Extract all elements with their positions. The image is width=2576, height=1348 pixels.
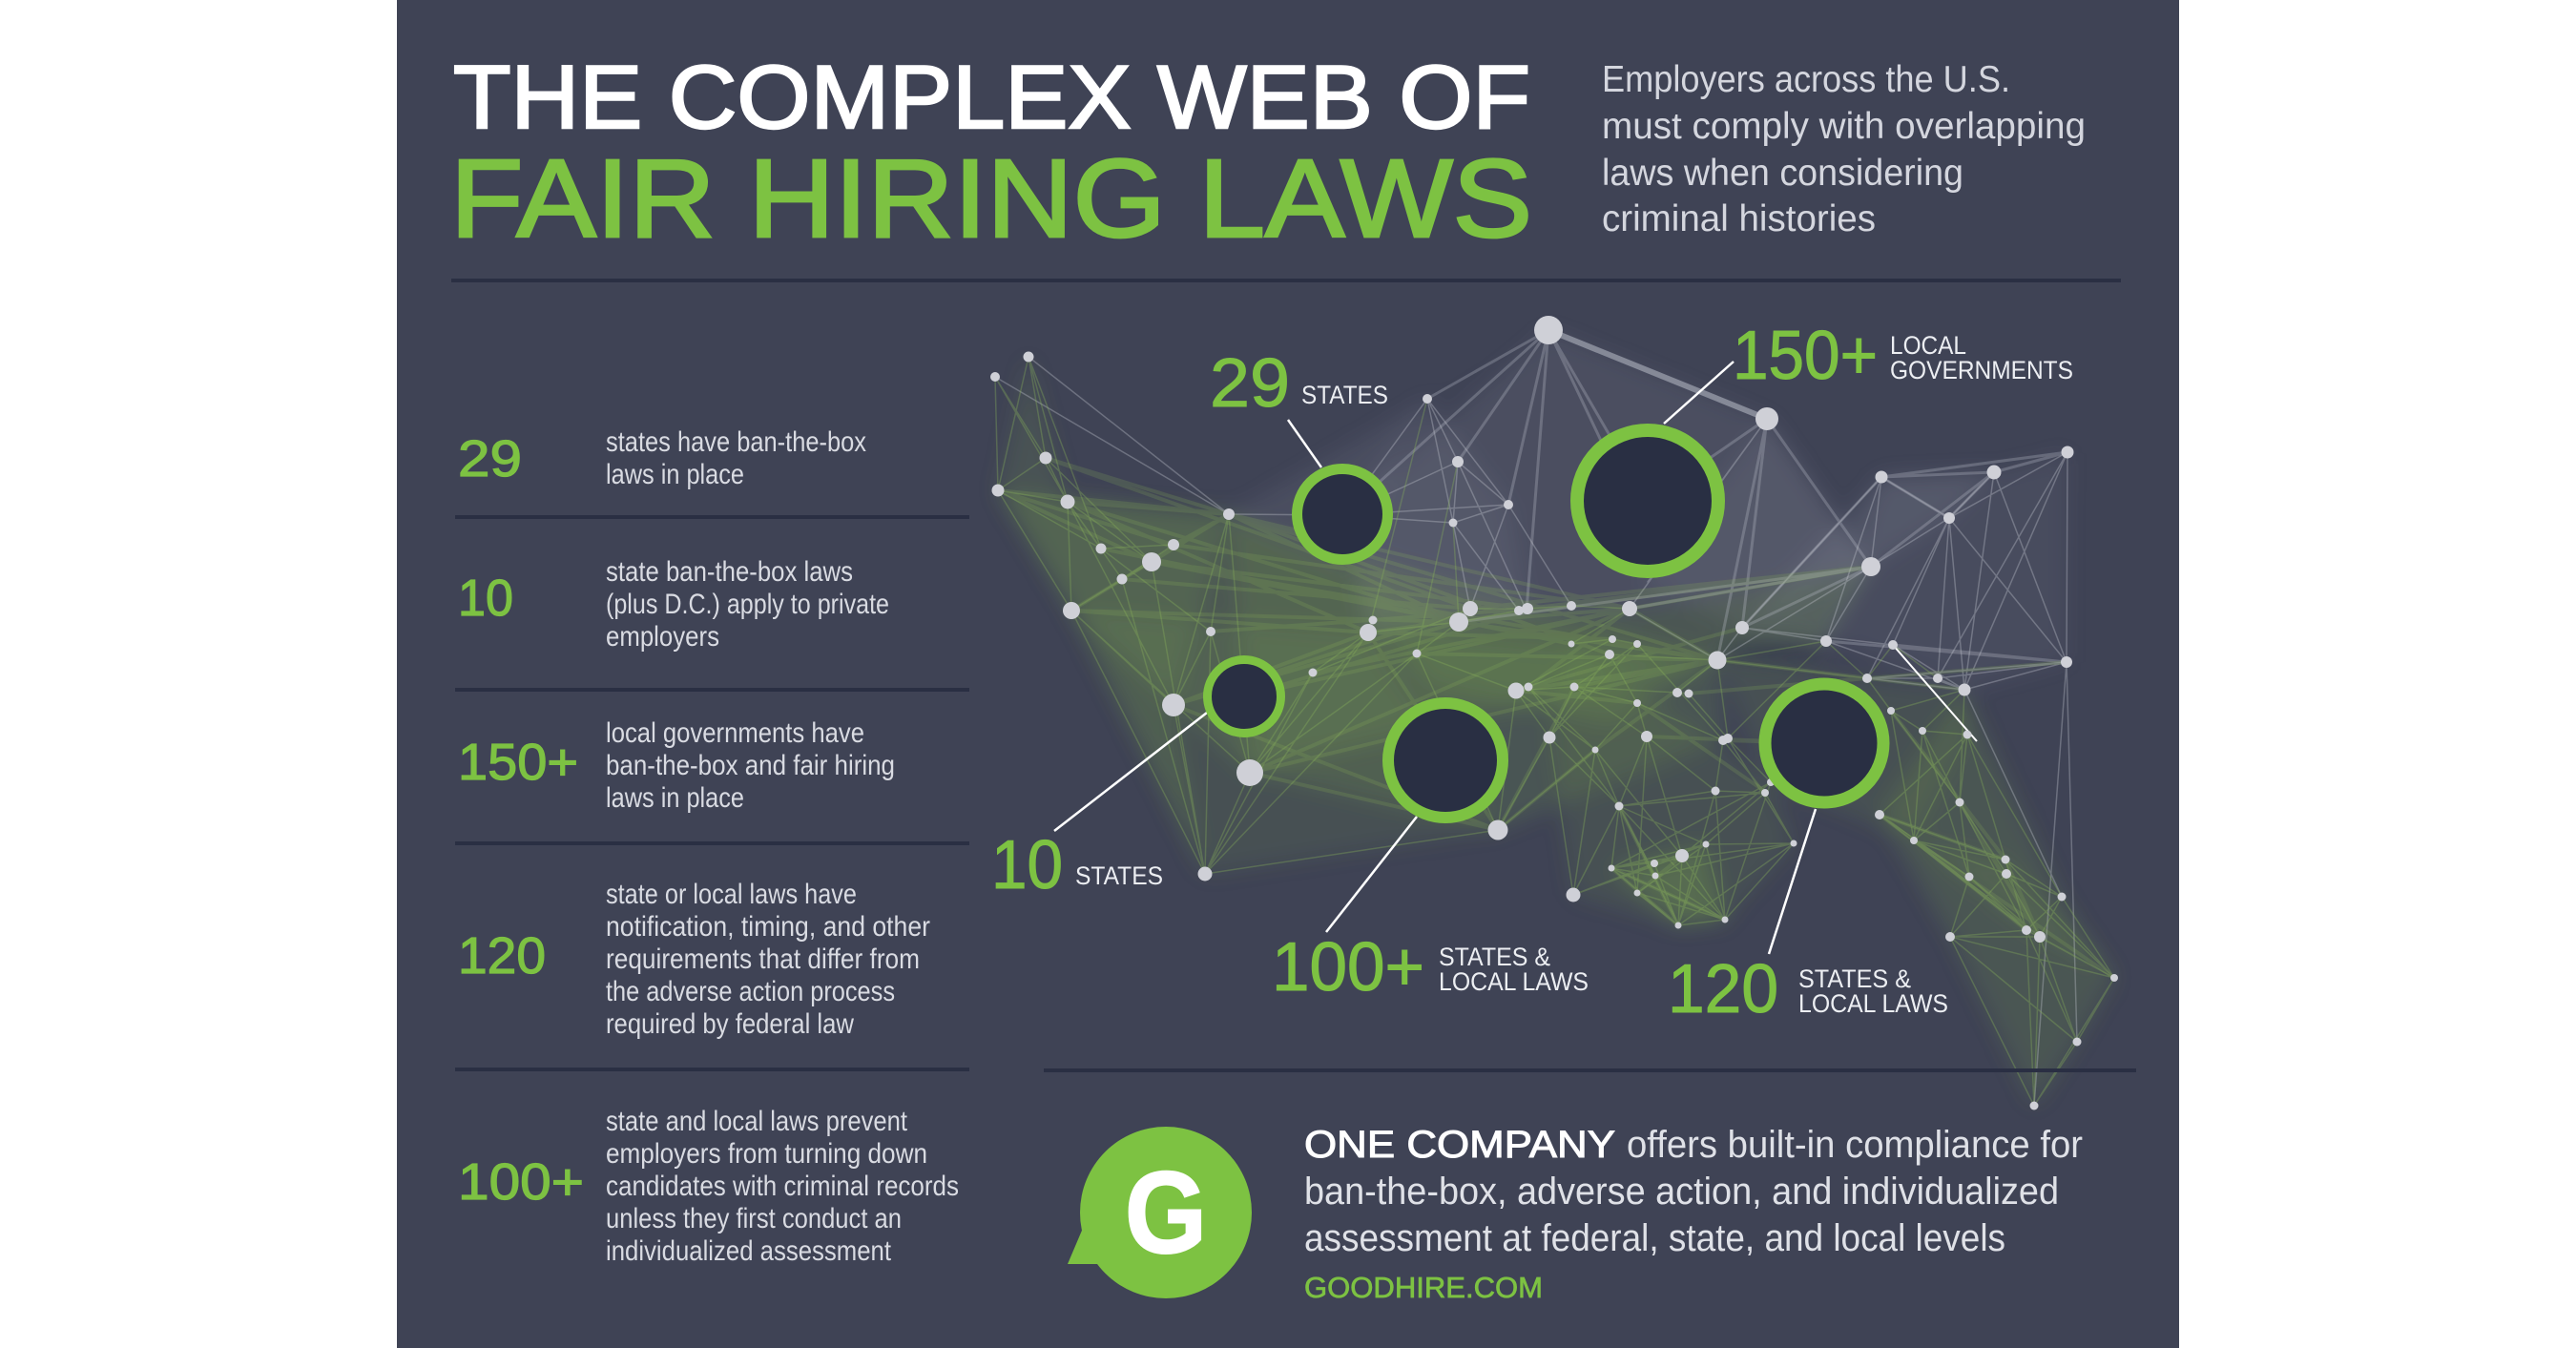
- stat: 10 state laws: state ban-the-box laws: [606, 556, 853, 588]
- callout: 100+ states and local laws: LOCAL LAWS: [1439, 967, 1589, 996]
- map haze fills: [998, 330, 2114, 1106]
- stat: 29 states: [458, 426, 866, 490]
- stat: 29 states: states have ban-the-box: [606, 426, 866, 458]
- callout: 120 states and local laws: LOCAL LAWS: [1798, 989, 1948, 1018]
- stat: 10 state laws: 10: [458, 570, 513, 627]
- panel: dark background: [397, 0, 2179, 1348]
- network map of the United States: [995, 330, 2114, 1106]
- call to action text: ONE COMPANY: [1304, 1124, 1615, 1166]
- intro text: must comply with overlapping: [1602, 106, 2086, 147]
- callout: 150+ local governments: [1577, 318, 2073, 571]
- stat: 150+ local governments: [458, 717, 895, 814]
- callout: 29 states: [1210, 345, 1388, 559]
- green network edges: [995, 357, 2114, 1106]
- white leader line near the east coast: [1893, 645, 1977, 741]
- callout: 100+ states and local laws: [1272, 703, 1589, 1006]
- stat: 150+ local governments: ban-the-box and fair hiring: [606, 750, 895, 781]
- title: THE COMPLEX WEB OF: [453, 47, 1530, 147]
- stat: 100+ state and local laws: [458, 1106, 959, 1267]
- stat: 100+ state and local laws: state and local laws prevent: [606, 1106, 908, 1137]
- icon: GoodHire speech bubble logo: G: [1125, 1148, 1207, 1277]
- callout: 150+ local governments: 150+: [1733, 318, 1878, 394]
- callout: 150+ local governments: LOCAL: [1890, 331, 1966, 360]
- stat: 10 state laws: employers: [606, 621, 719, 653]
- call to action text: GOODHIRE.COM: [1304, 1271, 1543, 1304]
- network nodes: [990, 316, 2118, 1110]
- stat: 29 states: 29: [458, 430, 522, 487]
- intro text: [1602, 59, 2086, 239]
- stat: 120 state or local laws: state or local laws have: [606, 879, 857, 910]
- stat: 100+ state and local laws: 100+: [458, 1153, 584, 1211]
- stat: 120 state or local laws: the adverse action process: [606, 976, 895, 1007]
- intro text: Employers across the U.S.: [1602, 59, 2010, 100]
- callout: 10 states: [991, 660, 1280, 903]
- stat: 150+ local governments: laws in place: [606, 782, 744, 814]
- stat: 29 states: laws in place: [606, 459, 744, 490]
- stat: 150+ local governments: 150+: [458, 734, 578, 791]
- title: [450, 47, 1532, 260]
- stat: 100+ state and local laws: individualized assessment: [606, 1235, 892, 1267]
- icon: GoodHire speech bubble logo: [1068, 1127, 1252, 1298]
- stat: 120 state or local laws: notification, timing, and other: [606, 911, 930, 943]
- stat: 100+ state and local laws: candidates with criminal records: [606, 1171, 959, 1202]
- stat: 10 state laws: (plus D.C.) apply to private: [606, 589, 889, 620]
- call to action text: offers built-in compliance for: [1627, 1124, 2083, 1166]
- callout: 29 states: 29: [1210, 345, 1290, 422]
- stat: 150+ local governments: local governments have: [606, 717, 864, 749]
- callout: 100+ states and local laws: 100+: [1272, 929, 1424, 1006]
- callout: 100+ states and local laws: STATES &: [1439, 943, 1550, 971]
- callout: 150+ local governments: GOVERNMENTS: [1890, 356, 2073, 384]
- callout: 29 states: STATES: [1301, 381, 1388, 409]
- stat: 120 state or local laws: 120: [458, 927, 546, 985]
- callout: 120 states and local laws: 120: [1668, 951, 1778, 1027]
- grey network edges: [995, 330, 2077, 1106]
- callout: 10 states: 10: [991, 827, 1063, 903]
- stat: 10 state laws: [458, 556, 889, 653]
- intro text: criminal histories: [1602, 198, 1876, 239]
- stat: 100+ state and local laws: employers from turning down: [606, 1138, 927, 1170]
- call to action text: ban-the-box, adverse action, and individualized: [1304, 1171, 2059, 1213]
- stat: 120 state or local laws: required by federal law: [606, 1008, 854, 1040]
- callout: 10 states: STATES: [1075, 861, 1163, 890]
- callout: 120 states and local laws: STATES &: [1798, 964, 1911, 993]
- stat: 120 state or local laws: requirements that differ from: [606, 944, 920, 975]
- intro text: laws when considering: [1602, 153, 1963, 194]
- callout: 120 states and local laws: [1668, 684, 1948, 1027]
- call to action text: assessment at federal, state, and local levels: [1304, 1217, 2005, 1259]
- stat: 100+ state and local laws: unless they first conduct an: [606, 1203, 902, 1234]
- title: FAIR HIRING LAWS: [450, 136, 1532, 260]
- call to action text: [1304, 1124, 2083, 1304]
- stat: 120 state or local laws: [458, 879, 930, 1040]
- panel: statistics list: [455, 426, 969, 1267]
